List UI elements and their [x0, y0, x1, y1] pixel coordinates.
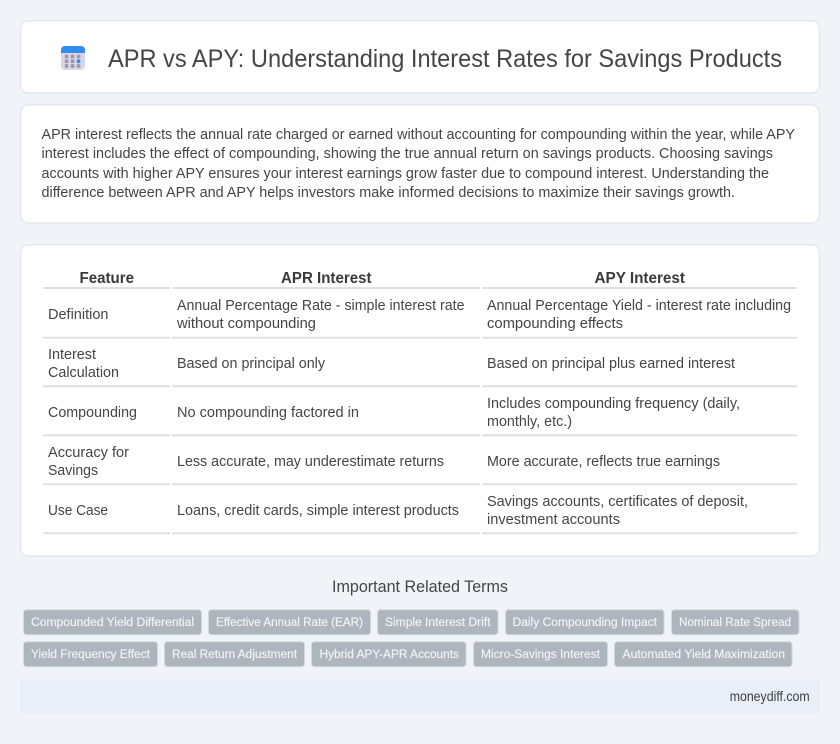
table row: definition: Definition — [48, 307, 108, 323]
icon: calendar — [61, 46, 85, 70]
related terms tags — [24, 610, 799, 667]
table row: use case — [48, 494, 748, 528]
related terms tags: Effective Annual Rate (EAR) — [216, 615, 363, 629]
title: APR vs APY: Understanding Interest Rates for Savings Products — [108, 46, 782, 73]
table row: accuracy for savings: More accurate, reflects true earnings — [487, 454, 720, 470]
footer: moneydiff.com — [730, 689, 810, 704]
table row: compounding: monthly, etc.) — [487, 414, 572, 430]
related terms tags: Daily Compounding Impact — [512, 615, 658, 629]
table row: interest calculation — [48, 347, 735, 381]
text block: introduction paragraph: interest includes the effect of compounding, showing the true annual return on savings products. Choosing savings — [42, 146, 773, 162]
related terms tags: Hybrid APY-APR Accounts — [320, 647, 459, 661]
footer — [20, 680, 820, 714]
table row: interest calculation: Based on principal only — [177, 356, 326, 372]
table row: accuracy for savings: Savings — [48, 463, 98, 479]
table row: use case: Savings accounts, certificates of deposit, — [487, 494, 748, 510]
table row: interest calculation: Based on principal plus earned interest — [487, 356, 735, 372]
table row: definition: Annual Percentage Rate - simple interest rate — [177, 298, 464, 314]
table row: use case: Loans, credit cards, simple interest products — [177, 503, 459, 519]
table header row — [80, 270, 686, 287]
table row: definition: without compounding — [176, 316, 316, 332]
table header row: APR Interest — [281, 270, 372, 287]
table row: definition: compounding effects — [487, 316, 623, 332]
table row: compounding: Compounding — [48, 405, 137, 421]
panel: header — [20, 21, 820, 93]
related terms tags: Compounded Yield Differential — [31, 615, 194, 629]
table row: use case: investment accounts — [487, 512, 620, 528]
text block: introduction paragraph: difference between APR and APY helps investors make informed decisions to maximize their savings growth. — [42, 185, 735, 201]
table row: definition: Annual Percentage Yield - interest rate including — [487, 298, 791, 314]
heading: important related terms: Important Related Terms — [332, 578, 508, 596]
table header row: APY Interest — [594, 270, 686, 287]
table row: accuracy for savings — [48, 445, 720, 479]
related terms tags: Simple Interest Drift — [385, 615, 491, 629]
panel: introduction — [20, 105, 820, 223]
related terms tags: Automated Yield Maximization — [622, 647, 785, 661]
table row: accuracy for savings: Accuracy for — [48, 445, 129, 461]
table row: compounding — [48, 396, 740, 430]
related terms tags: Real Return Adjustment — [172, 647, 298, 661]
table row: interest calculation: Interest — [48, 347, 96, 363]
related terms tags: Nominal Rate Spread — [679, 615, 791, 629]
table row: compounding: Includes compounding frequency (daily, — [487, 396, 740, 412]
text block: introduction paragraph: accounts with higher APY ensures your interest earnings grow faster due to compound interest. Understanding the — [42, 166, 769, 182]
table row: accuracy for savings: Less accurate, may underestimate returns — [177, 454, 444, 470]
panel: comparison table — [20, 245, 820, 556]
text block: introduction paragraph — [42, 127, 795, 201]
related terms tags: Yield Frequency Effect — [31, 647, 151, 661]
table row: definition — [48, 298, 791, 332]
text block: introduction paragraph: APR interest reflects the annual rate charged or earned without accounting for compounding within the year, while APY — [42, 127, 795, 143]
table row: interest calculation: Calculation — [48, 365, 119, 381]
table header row: Feature — [80, 270, 134, 287]
table row: compounding: No compounding factored in — [177, 405, 359, 421]
related terms tags: Micro-Savings Interest — [481, 647, 601, 661]
table row: use case: Use Case — [48, 503, 108, 519]
